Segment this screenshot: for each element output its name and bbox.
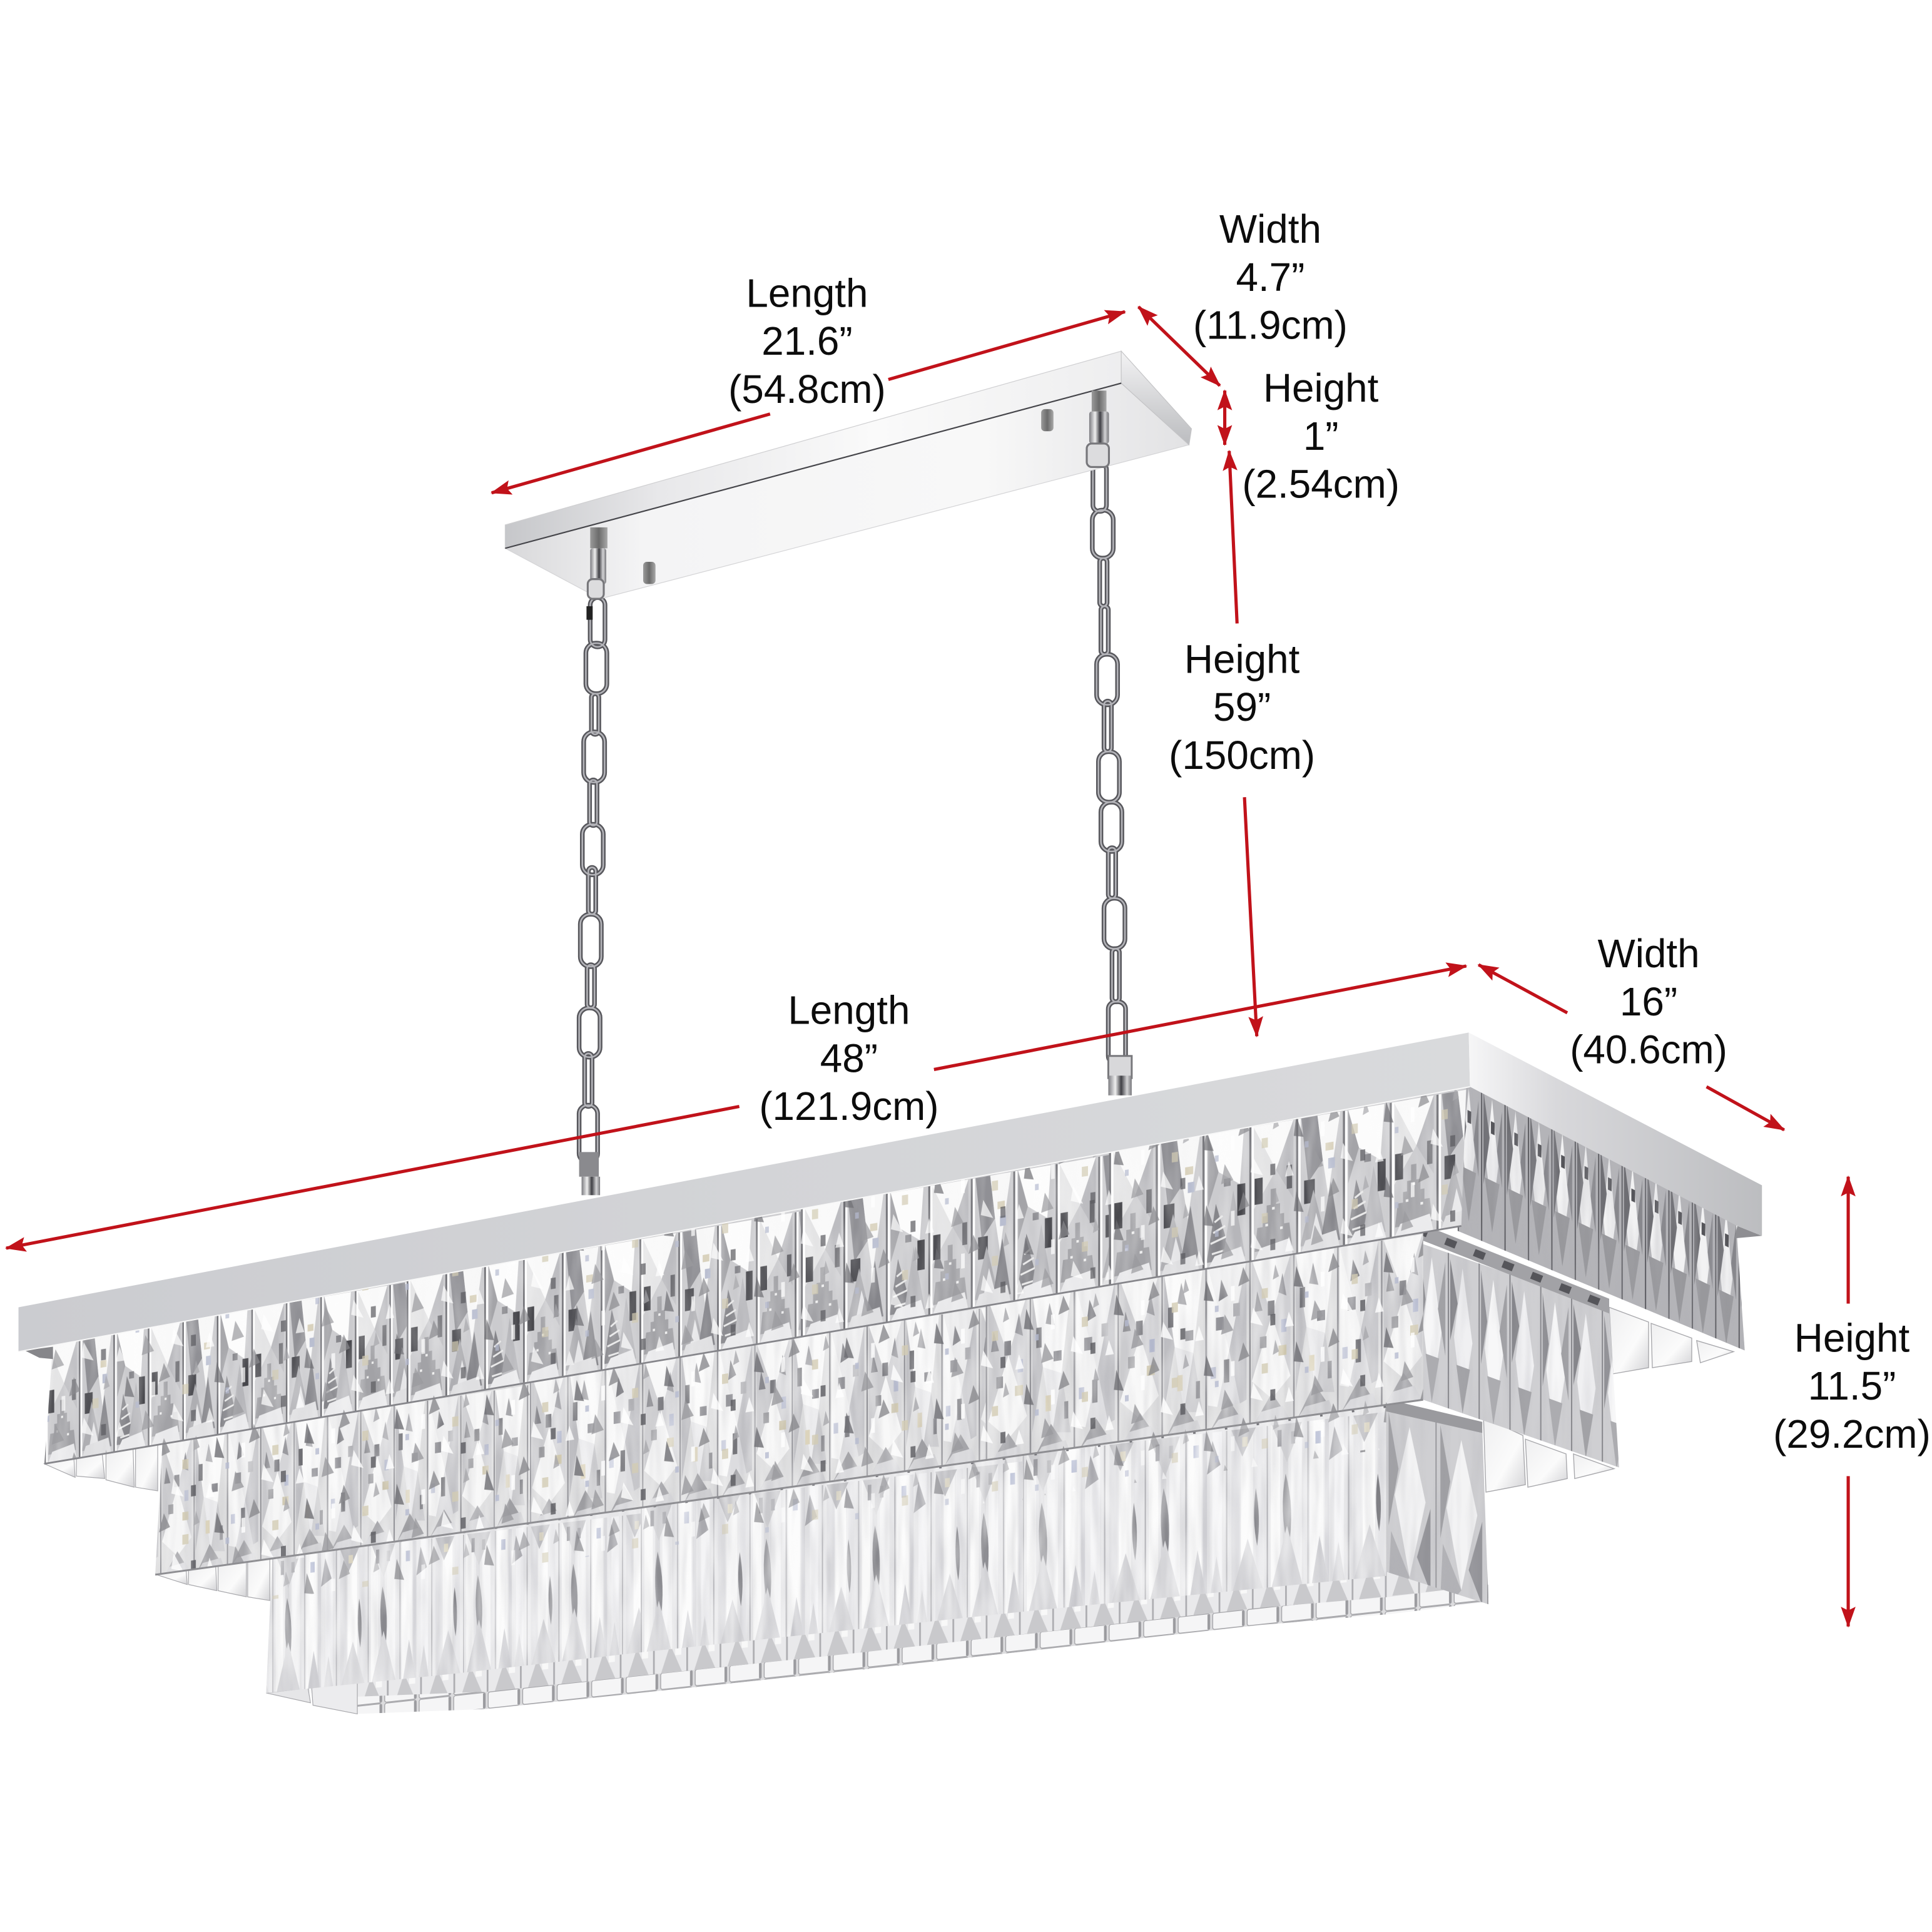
- label: canopy height: 1”: [1303, 414, 1339, 459]
- chain: right: [1092, 463, 1132, 1096]
- canopy front strip: [505, 351, 1121, 548]
- arrow: chandelier length 48: [6, 966, 1467, 1248]
- label: canopy width: 4.7”: [1236, 255, 1304, 300]
- arrow: chandelier height 11.5: [1848, 1177, 1849, 1627]
- label: canopy length: 21.6”: [761, 318, 853, 364]
- tier 3 front crystals: [266, 1403, 1386, 1693]
- tier 2 lower-left glass pieces: [156, 1556, 270, 1600]
- arrow: chandelier width 16: [1478, 965, 1784, 1130]
- label: canopy width: Width: [1219, 206, 1321, 252]
- label: chandelier width: 16”: [1620, 979, 1677, 1024]
- label: chandelier width: Width: [1598, 931, 1700, 976]
- tier 1 lower-left glass pieces: [44, 1444, 158, 1491]
- chain connector: left: [587, 527, 608, 599]
- label: drop height: 59”: [1213, 684, 1271, 730]
- label: canopy height: Height: [1263, 365, 1379, 410]
- canopy screw: left: [643, 562, 656, 584]
- canopy end face: [1121, 351, 1191, 445]
- canopy bottom face: [505, 383, 1189, 599]
- label: canopy width: (11.9cm): [1193, 303, 1348, 348]
- label: chandelier height: Height: [1794, 1315, 1909, 1360]
- label: chandelier height: 11.5”: [1808, 1363, 1896, 1408]
- label: canopy length: (54.8cm): [728, 367, 886, 412]
- label: chandelier length: 48”: [820, 1035, 878, 1080]
- label: chandelier length: Length: [788, 988, 910, 1033]
- canopy screw: right: [1041, 409, 1054, 431]
- label: chandelier height: (29.2cm): [1773, 1411, 1931, 1457]
- lower frame: [19, 1032, 1762, 1359]
- label: chandelier width: (40.6cm): [1570, 1027, 1727, 1072]
- label: drop height: (150cm): [1169, 733, 1315, 778]
- tier 2 side crystals: [1417, 1223, 1619, 1492]
- canopy plate: [505, 351, 1191, 599]
- tier 2 front crystals: [155, 1228, 1423, 1575]
- chain connector: right: [1087, 390, 1109, 467]
- chain: left: [579, 597, 607, 1195]
- label: canopy height: (2.54cm): [1242, 462, 1400, 507]
- arrow: canopy height 1: [1224, 390, 1226, 445]
- tier 3 bottom rows and side: [266, 1398, 1488, 1714]
- tier 1 front crystals: [44, 1085, 1467, 1464]
- tier 1 side crystals: [1458, 1078, 1745, 1374]
- tier 3 chrome rail: [1384, 1398, 1482, 1433]
- frame end face: [1469, 1032, 1762, 1236]
- label: chandelier length: (121.9cm): [759, 1084, 939, 1129]
- label: canopy length: Length: [746, 270, 868, 315]
- arrow: canopy length 21.6: [492, 312, 1125, 493]
- arrow: canopy width 4.7: [1139, 307, 1220, 385]
- arrow: drop height 59: [1229, 451, 1257, 1036]
- tier 2 chrome rail: [1417, 1223, 1609, 1313]
- frame front face: [19, 1032, 1470, 1351]
- label: drop height: Height: [1184, 636, 1300, 681]
